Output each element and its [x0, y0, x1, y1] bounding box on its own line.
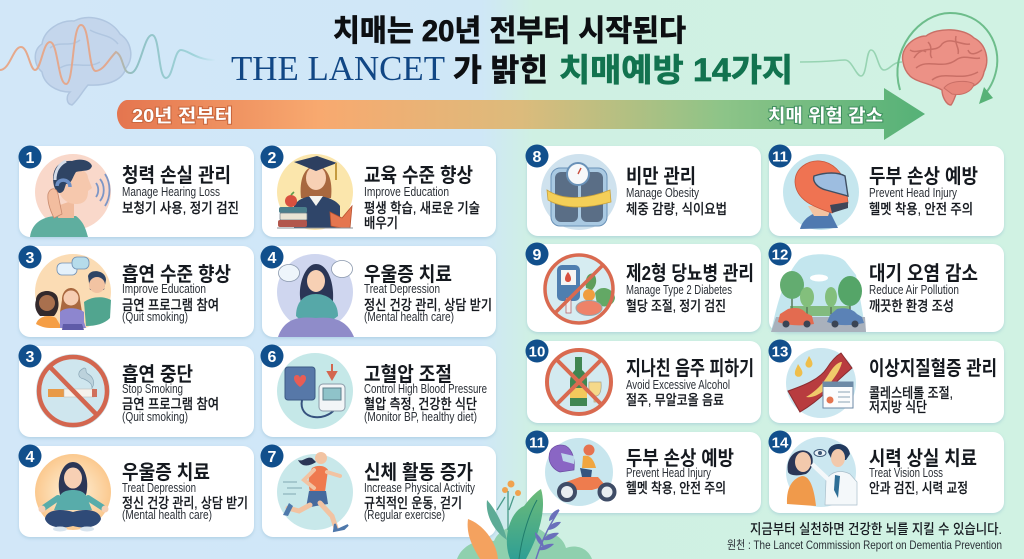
badge 6 — [260, 344, 284, 368]
panel: card 7 meditation: 정신 건강 관리, 상담 받기 — [122, 495, 248, 511]
badge 10 — [526, 340, 548, 362]
badge 4 — [18, 444, 42, 468]
panel: card 1 hearing loss: Manage Hearing Loss — [122, 185, 220, 199]
panel: card 14 vision: 안과 검진, 시력 교정 — [869, 480, 968, 496]
illustration: eye exam — [786, 437, 857, 507]
panel: card 8 physical activity: 규칙적인 운동, 걷기 — [364, 495, 462, 511]
illustration: man cupping ear — [30, 154, 111, 237]
footer message — [727, 521, 1002, 552]
panel: card 7 meditation: Treat Depression — [122, 481, 196, 495]
panel: card 7 meditation: 우울증 치료 — [122, 461, 210, 484]
illustration: scale and tape measure — [541, 154, 617, 230]
panel: card 4 depression — [260, 246, 496, 337]
panel: card 9 diabetes: 혈당 조절, 정기 검진 — [626, 298, 726, 314]
panel: card 5 stop smoking: (Quit smoking) — [122, 410, 188, 424]
badge 13: 13 — [772, 344, 788, 360]
icon: healthy brain with circular arrow — [800, 13, 997, 105]
panel: card 8 physical activity: Increase Physical Activity — [364, 481, 476, 495]
decoration: plant leaves — [457, 480, 592, 559]
panel: card 1 hearing loss — [18, 146, 254, 237]
badge 9 — [526, 242, 548, 266]
panel: card 6 blood pressure: (Monitor BP, healthy diet) — [364, 410, 477, 424]
panel: card 3 smoking education: (Quit smoking) — [122, 310, 188, 324]
panel: card 4 depression: Treat Depression — [364, 282, 440, 296]
illustration: motorcycle rider — [545, 438, 614, 506]
panel: card 3 smoking education — [18, 246, 254, 337]
panel: card 13 dyslipidemia: 저지방 식단 — [869, 399, 927, 415]
panel: card 10 alcohol: 지나친 음주 피하기 — [626, 357, 754, 380]
panel: card 12 air pollution: Reduce Air Pollution — [869, 283, 959, 297]
icon: faded brain with brain wave — [0, 18, 215, 105]
badge 3: 3 — [26, 349, 35, 366]
illustration: woman meditating — [35, 454, 111, 532]
arrow: timeline bar: 20년 전부터 — [132, 106, 233, 126]
panel: card 11 head injury motorcycle: 두부 손상 예방 — [626, 447, 734, 470]
badge 14: 14 — [772, 434, 789, 452]
panel: card 11 head injury: 헬멧 착용, 안전 주의 — [869, 201, 973, 217]
panel: card 8 physical activity: (Regular exercise) — [364, 508, 445, 522]
panel: card 13 dyslipidemia: 이상지질혈증 관리 — [869, 357, 997, 380]
badge 13 — [768, 340, 792, 362]
panel: card 2 education: 평생 학습, 새로운 기술 — [364, 200, 480, 216]
panel: card 9 diabetes: Manage Type 2 Diabetes — [626, 283, 732, 297]
badge 3 — [18, 344, 42, 368]
panel: card 5 stop smoking: 흡연 중단 — [122, 363, 193, 386]
illustration: helmet — [783, 154, 859, 230]
illustration: no diabetes sign — [545, 255, 615, 323]
panel: card 11 head injury — [768, 144, 1004, 236]
panel: card 10 alcohol — [526, 340, 761, 423]
panel: card 3 smoking education: 흡연 수준 향상 — [122, 263, 231, 286]
panel: card 11 head injury motorcycle: Prevent Head Injury — [626, 466, 712, 480]
panel: card 8 obesity: 비만 관리 — [626, 165, 696, 188]
panel: card 7 meditation: (Mental health care) — [122, 508, 212, 522]
badge 8: 8 — [533, 149, 542, 166]
illustration: blood pressure monitor — [277, 353, 353, 429]
badge 3: 3 — [26, 250, 35, 267]
title: THE LANCET — [231, 49, 445, 88]
badge 4: 4 — [268, 250, 277, 267]
panel: card 3 smoking education: 금연 프로그램 참여 — [122, 297, 219, 313]
badge 4: 4 — [26, 449, 35, 466]
illustration: no alcohol sign — [546, 349, 612, 415]
badge 1 — [18, 146, 42, 168]
panel: card 13 dyslipidemia: 콜레스테롤 조절, — [869, 385, 953, 401]
panel: card 9 diabetes: 제2형 당뇨병 관리 — [626, 262, 754, 285]
badge 7: 7 — [268, 449, 277, 466]
badge 2: 2 — [268, 150, 277, 167]
panel: card 4 depression: 정신 건강 관리, 상담 받기 — [364, 297, 492, 313]
panel: card 11 head injury: 두부 손상 예방 — [869, 165, 978, 188]
panel: card 1 hearing loss: 보청기 사용, 정기 검진 — [122, 200, 239, 216]
arrow: timeline bar — [117, 88, 925, 140]
panel: card 10 alcohol: 절주, 무알코올 음료 — [626, 392, 724, 408]
illustration: runner — [277, 452, 353, 531]
panel: card 5 stop smoking — [18, 344, 254, 437]
badge 14 — [768, 430, 792, 454]
illustration: no smoking sign — [36, 354, 110, 428]
panel: card 6 blood pressure: 고혈압 조절 — [364, 363, 452, 386]
panel: card 8 physical activity — [260, 444, 496, 537]
illustration: graduate with books — [277, 154, 353, 230]
arrow: timeline bar: 치매 위험 감소 — [768, 106, 883, 126]
badge 11 — [526, 430, 548, 454]
panel: card 11 head injury: Prevent Head Injury — [869, 186, 958, 200]
panel: card 8 obesity: Manage Obesity — [626, 186, 700, 200]
badge 4 — [260, 246, 284, 268]
panel: card 2 education: 배우기 — [364, 215, 398, 231]
panel: card 11 head injury motorcycle — [526, 430, 761, 513]
panel: card 4 depression: (Mental health care) — [364, 310, 454, 324]
badge 7 — [260, 444, 284, 468]
panel: card 2 education: 교육 수준 향상 — [364, 164, 473, 187]
panel: card 2 education: Improve Education — [364, 185, 449, 199]
panel: card 11 head injury motorcycle: 헬멧 착용, 안전 주의 — [626, 480, 726, 496]
badge 10: 10 — [529, 344, 545, 360]
badge 1: 1 — [26, 150, 35, 167]
panel: card 12 air pollution: 대기 오염 감소 — [869, 262, 978, 285]
title: 치매예방 14가지 — [559, 52, 793, 88]
panel: card 4 depression: 우울증 치료 — [364, 263, 452, 286]
panel: card 7 meditation — [18, 444, 254, 537]
panel: card 6 blood pressure: 혈압 측정, 건강한 식단 — [364, 396, 477, 412]
badge 11: 11 — [772, 148, 788, 166]
badge 11 — [768, 144, 792, 168]
illustration: group of friends talking — [35, 254, 111, 330]
badge 11: 11 — [529, 434, 545, 452]
badge 12 — [768, 242, 792, 266]
panel: card 1 hearing loss: 청력 손실 관리 — [122, 164, 231, 187]
panel: card 2 education — [260, 146, 496, 237]
panel: card 6 blood pressure — [260, 344, 496, 437]
badge 8 — [526, 144, 548, 168]
panel: card 8 obesity — [526, 144, 761, 236]
badge 2 — [260, 146, 284, 168]
panel: card 8 obesity: 체중 감량, 식이요법 — [626, 201, 727, 217]
panel: card 12 air pollution — [768, 242, 1004, 332]
panel: card 3 smoking education: Improve Education — [122, 282, 206, 296]
title: 치매는 20년 전부터 시작된다 — [333, 15, 686, 48]
illustration: artery with plaque — [786, 348, 856, 418]
panel: card 8 physical activity: 신체 활동 증가 — [364, 461, 473, 484]
panel: card 13 dyslipidemia — [768, 340, 1004, 423]
badge 9: 9 — [533, 247, 542, 264]
title — [231, 15, 793, 88]
title: 가 밝힌 — [453, 53, 548, 88]
badge 6: 6 — [268, 349, 277, 366]
panel: card 12 air pollution: 깨끗한 환경 조성 — [869, 298, 954, 314]
badge 12: 12 — [772, 246, 788, 264]
panel: card 5 stop smoking: 금연 프로그램 참여 — [122, 396, 219, 412]
badge 3 — [18, 246, 42, 268]
panel: card 10 alcohol: Avoid Excessive Alcohol — [626, 378, 730, 392]
illustration: woman in bed with speech bubbles — [277, 254, 354, 337]
panel: card 9 diabetes — [526, 242, 761, 332]
panel: card 6 blood pressure: Control High Blood Pressure — [364, 382, 487, 396]
panel: card 14 vision — [768, 430, 1004, 513]
panel: card 14 vision: 시력 상실 치료 — [869, 447, 977, 470]
panel: card 14 vision: Treat Vision Loss — [869, 466, 943, 480]
illustration: trees and cars — [771, 254, 866, 332]
panel: card 5 stop smoking: Stop Smoking — [122, 382, 183, 396]
